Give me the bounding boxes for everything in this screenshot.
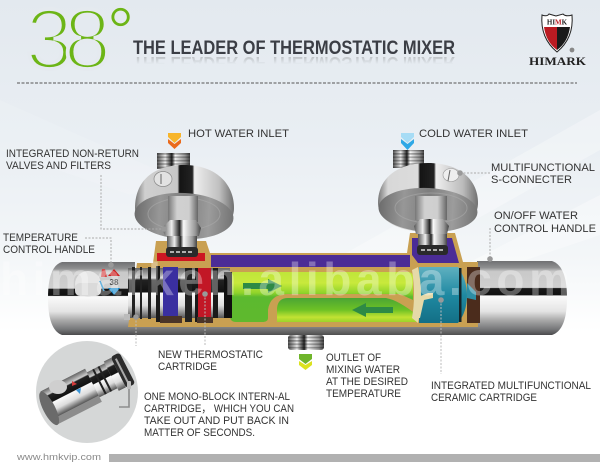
icon: cold water arrow: [401, 133, 414, 150]
label: mono-block note: TAKE OUT AND PUT BACK IN: [144, 415, 289, 427]
leader: on/off handle: [487, 228, 493, 262]
label: cold water inlet: COLD WATER INLET: [419, 128, 528, 140]
right valve: [377, 150, 479, 255]
heading: [133, 37, 455, 74]
label: s-connecter: S-CONNECTER: [491, 174, 572, 186]
label: temperature control handle: TEMPERATURE: [3, 232, 78, 244]
flow arrow: right: [243, 279, 282, 293]
label: mono-block note: MATTER OF SECONDS.: [144, 427, 255, 439]
leader: s-connecter: [457, 170, 490, 176]
footer bar: [109, 454, 600, 462]
knob and temperature scale: 38: [110, 278, 119, 287]
label: outlet: AT THE DESIRED: [326, 376, 408, 388]
label: non-return valves: [6, 148, 139, 172]
label: mono-block note: [144, 391, 294, 439]
flow arrow: left: [352, 303, 393, 317]
label: ceramic cartridge: [431, 380, 591, 404]
label: ceramic cartridge: CERAMIC CARTRIDGE: [431, 392, 537, 404]
label: s-connecter: [491, 162, 595, 186]
ceramic cartridge: [412, 267, 480, 323]
heading: THE LEADER OF THERMOSTATIC MIXER: [133, 52, 455, 74]
logo: Himark shield: HIMARK: [529, 54, 587, 68]
leader: temperature handle: [85, 238, 114, 268]
label: non-return valves: VALVES AND FILTERS: [6, 160, 111, 172]
green upper chamber: [230, 272, 413, 322]
label: on/off handle: ON/OFF WATER: [494, 210, 578, 222]
label: outlet: MIXING WATER: [326, 364, 400, 376]
logo: Himark shield: [529, 14, 587, 68]
icon: hot water arrow: [168, 133, 181, 149]
label: non-return valves: INTEGRATED NON-RETURN: [6, 148, 139, 160]
label: mono-block note: ONE MONO-BLOCK INTERN-AL: [144, 391, 290, 403]
left valve: [133, 153, 235, 257]
label: on/off handle: CONTROL HANDLE: [494, 223, 596, 235]
watermark: himarken.alibaba.com: [0, 253, 570, 305]
purple water channel: [211, 238, 459, 267]
label: s-connecter: MULTIFUNCTIONAL: [491, 162, 595, 174]
label: new thermostatic cartridge: [158, 349, 263, 373]
left chrome handle: [48, 262, 135, 335]
leader: new cartridge: [124, 291, 208, 346]
right chrome handle: [477, 261, 567, 335]
brass housing: [128, 233, 478, 327]
logo: Himark shield: HIMK: [547, 18, 568, 26]
allen key: [119, 386, 129, 407]
inset: removable cartridge: [35, 341, 138, 443]
thermostatic cartridge: [128, 266, 232, 323]
leader: non-return valves: [101, 175, 167, 232]
green lower chamber: [277, 298, 417, 322]
label: temperature control handle: CONTROL HANDLE: [3, 244, 95, 256]
label: outlet: TEMPERATURE: [326, 388, 401, 400]
label: hot water inlet: HOT WATER INLET: [188, 128, 289, 140]
leader: ceramic cartridge: [438, 297, 444, 374]
heading: THE LEADER OF THERMOSTATIC MIXER: [133, 37, 455, 59]
icon: outlet arrow: [299, 354, 312, 370]
label: outlet: OUTLET OF: [326, 352, 381, 364]
label: on/off handle: [494, 210, 596, 235]
bottom chrome strip: [128, 326, 480, 335]
red hot channel: [157, 253, 205, 261]
label: outlet: [326, 352, 408, 400]
label: new thermostatic cartridge: CARTRIDGE: [158, 361, 217, 373]
label: new thermostatic cartridge: NEW THERMOSTATIC: [158, 349, 263, 361]
mixer body: [48, 233, 567, 335]
label: temperature control handle: [3, 232, 95, 256]
knob and temperature scale: [75, 269, 120, 297]
label: mono-block note: CARTRIDGE， WHICH YOU CAN: [144, 403, 294, 415]
outlet threads: [288, 335, 324, 350]
